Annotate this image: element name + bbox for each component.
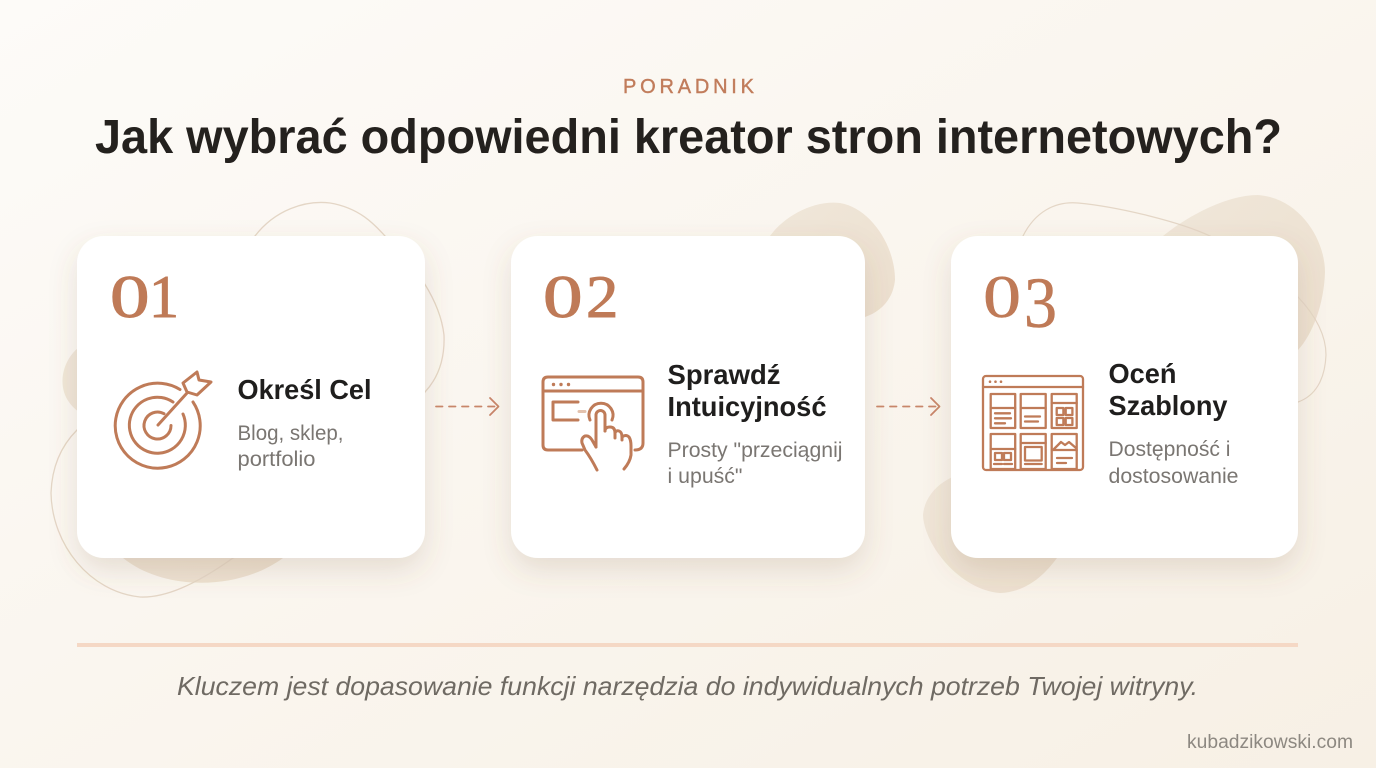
step description: Prosty "przeciągnij [668,438,842,462]
step description [668,438,842,488]
step number: 1 [149,264,179,330]
step heading: Sprawdź [668,359,780,390]
card background [77,236,425,558]
step number: 0 [983,264,1021,330]
panel: step 3 [951,236,1298,558]
step heading [1108,358,1228,421]
background blob: upper right of card 3 [1158,195,1325,356]
step description [1108,437,1238,488]
step heading: Oceń [1108,358,1176,389]
step number: 0 [543,264,583,331]
step number: 0 [110,264,150,331]
background outline: left [51,202,444,597]
website credit: kubadzikowski.com [1187,732,1353,753]
card background [951,236,1298,558]
step number [983,262,1057,343]
title: Jak wybrać odpowiedni kreator stron internetowych? [95,111,1282,164]
background blob: left filled [62,329,311,583]
step number [110,264,179,331]
background blob: lower left of card 3 [923,470,1062,593]
step description [238,421,344,471]
panel: step 2 [511,236,865,558]
step description: Dostępność i [1108,437,1230,461]
step description: Blog, sklep, [238,421,344,445]
icon: template grid [983,376,1083,470]
background blob: top middle [769,203,895,319]
step heading: Intuicyjność [668,391,826,422]
step description: i upuść" [668,464,742,488]
step number [543,263,618,331]
step description: portfolio [238,447,316,471]
panel: step 1 [77,236,425,558]
card background [511,236,865,558]
takeaway text: Kluczem jest dopasowanie funkcji narzędzia do indywidualnych potrzeb Twojej witryny. [177,671,1198,701]
step heading [668,359,826,422]
step number: 3 [1024,262,1057,343]
icon: target with arrow [115,372,211,468]
icon: browser window with pointing hand [543,377,643,470]
eyebrow label: PORADNIK [623,76,755,98]
background outline: right [1021,203,1326,404]
step description: dostosowanie [1108,464,1238,488]
step heading: Szablony [1108,390,1228,421]
arrow: step 2 to 3 [877,398,940,415]
divider [77,643,1298,647]
step number: 2 [586,263,618,330]
step heading: Określ Cel [238,374,372,405]
arrow: step 1 to 2 [436,398,498,415]
